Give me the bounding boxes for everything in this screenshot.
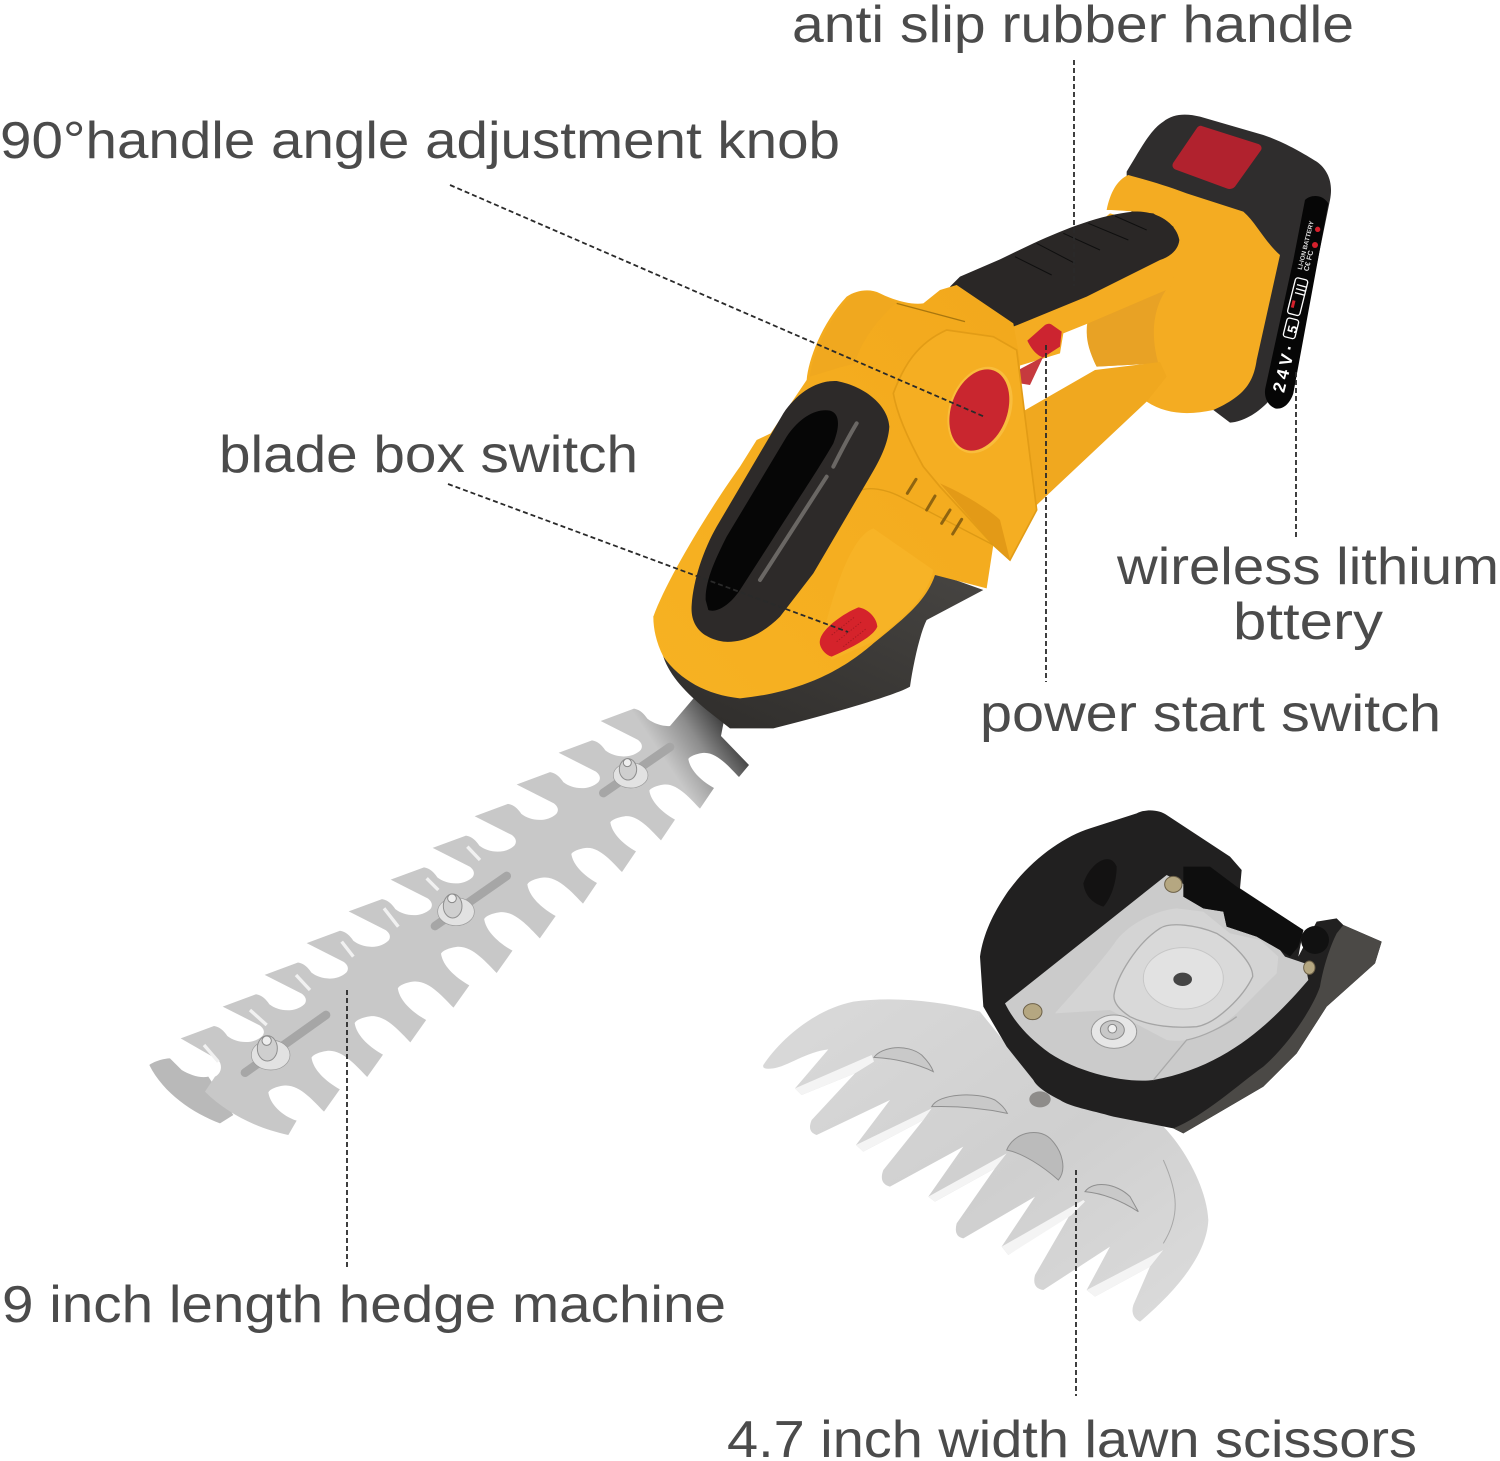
label: wireless lithium battery: wireless lithium <box>1116 538 1499 596</box>
centre hole <box>1173 973 1192 986</box>
bolt 1 <box>251 1036 290 1070</box>
bolt 3 <box>613 759 648 788</box>
label: handle angle knob: 90°handle angle adjustment knob <box>0 112 840 170</box>
shaded under-panel <box>940 483 1010 560</box>
housing shell <box>980 810 1382 1133</box>
plate stamped step <box>1055 908 1278 1041</box>
bolt 2 <box>438 894 474 926</box>
dark base of head <box>653 573 983 728</box>
leader: power start switch <box>1045 345 1047 682</box>
battery label <box>1265 196 1328 409</box>
plate lower step <box>1153 1017 1237 1080</box>
battery release button <box>1172 126 1262 189</box>
blade slots <box>245 747 670 1073</box>
vents <box>907 479 962 534</box>
lower arm <box>1015 362 1167 530</box>
raised oval <box>1114 925 1253 1027</box>
battery label: LI-ION BATTERY <box>1297 220 1316 270</box>
angle adjustment knob <box>936 358 1024 462</box>
tooth highlights <box>204 847 480 1062</box>
grey front shell <box>1173 925 1382 1133</box>
leader: anti slip rubber handle <box>1073 60 1075 286</box>
leader: lawn scissors <box>1075 1170 1077 1396</box>
knob side panel <box>893 330 1037 560</box>
metal base plate <box>1005 875 1308 1081</box>
battery label: C€ FC <box>1302 249 1316 272</box>
label: hedge machine: 9 inch length hedge machine <box>2 1276 726 1334</box>
inner stepped panel <box>822 528 933 660</box>
label: wireless lithium battery: bttery <box>1233 593 1383 651</box>
leader: lithium battery <box>1295 372 1297 540</box>
main bolt <box>1091 1015 1137 1048</box>
scissor blade body <box>763 999 1208 1322</box>
hedge trimmer head <box>653 285 1037 728</box>
groove <box>897 303 965 322</box>
cavity sheen <box>1083 859 1117 907</box>
lawn scissor blade <box>763 999 1208 1322</box>
upper arm <box>983 213 1180 377</box>
centre boss <box>1143 948 1223 1009</box>
rear cap panel <box>810 291 897 377</box>
yellow head <box>653 285 1037 698</box>
leader: angle adjustment knob <box>450 185 985 417</box>
label: wireless lithium battery <box>1116 538 1499 651</box>
latch knob <box>1301 926 1329 954</box>
lower blade plate <box>149 1058 233 1123</box>
battery label: 24V· <box>1268 343 1300 394</box>
blade box slider switch <box>820 607 877 657</box>
bevels <box>795 1055 1163 1297</box>
rear housing <box>1087 175 1280 413</box>
small screws <box>1023 876 1315 1020</box>
battery label: 5 <box>1284 323 1301 335</box>
inner handle shade <box>1087 287 1168 367</box>
rear handle and battery <box>950 115 1331 530</box>
upper blade with teeth <box>181 697 749 1135</box>
label: power start switch: power start switch <box>980 685 1441 743</box>
panel edge <box>853 489 993 545</box>
leader: hedge machine <box>346 990 348 1270</box>
rivet hole <box>1029 1091 1051 1107</box>
battery pack <box>1127 115 1331 423</box>
scissor housing <box>980 810 1382 1133</box>
connector block <box>1183 867 1303 957</box>
blade box window <box>692 381 889 642</box>
leader: blade box switch <box>448 484 848 632</box>
blade arc edge <box>1163 1160 1175 1243</box>
power trigger <box>1018 324 1062 385</box>
rubber grip <box>950 212 1179 332</box>
label: blade box switch: blade box switch <box>219 426 638 484</box>
hedge blade <box>149 697 749 1135</box>
blade windows <box>874 1048 1138 1212</box>
